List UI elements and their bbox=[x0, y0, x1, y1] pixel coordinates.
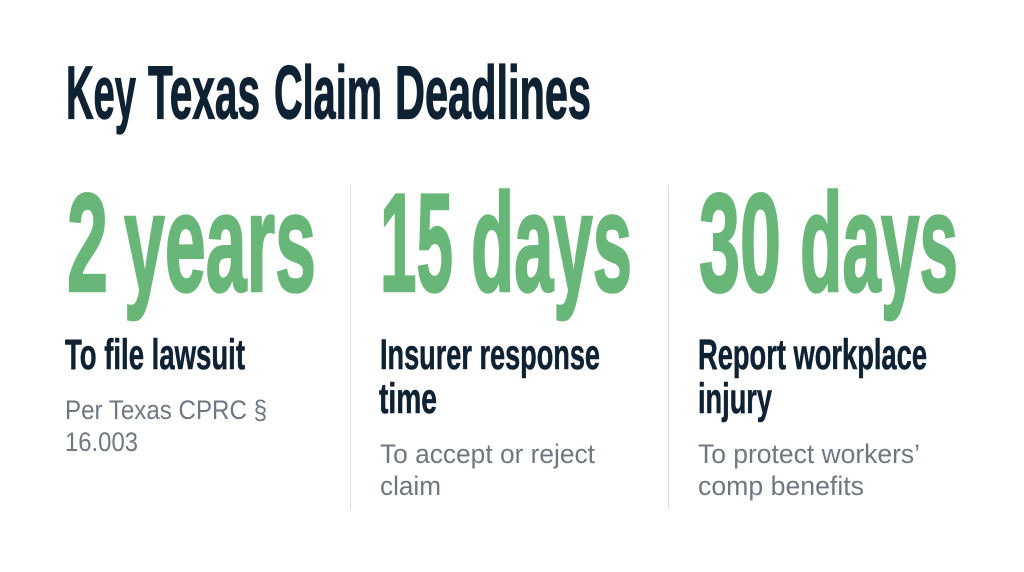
title: Claim bbox=[274, 50, 382, 134]
heading: insurer response time: time bbox=[379, 375, 437, 423]
description: per Texas CPRC: 16.003 bbox=[65, 427, 138, 457]
heading: to file lawsuit: To file lawsuit bbox=[65, 331, 245, 379]
title: Texas bbox=[148, 50, 260, 134]
big number: 15 days bbox=[380, 164, 632, 321]
title: Deadlines bbox=[395, 50, 591, 134]
title: Key bbox=[66, 50, 136, 134]
heading: insurer response time bbox=[379, 331, 600, 423]
big number: 2 years: years bbox=[124, 164, 316, 321]
title bbox=[66, 50, 591, 134]
heading: report workplace injury bbox=[698, 331, 927, 423]
panel: 15 days bbox=[379, 164, 632, 501]
description: to accept or reject claim bbox=[380, 439, 595, 501]
description: per Texas CPRC bbox=[65, 395, 267, 457]
big number: 15 days: days bbox=[471, 164, 632, 321]
panel: 30 days bbox=[698, 164, 958, 501]
big number: 2 years: 2 bbox=[67, 164, 108, 321]
big number: 15 days: 15 bbox=[380, 164, 453, 321]
heading: insurer response time: Insurer response bbox=[380, 331, 600, 379]
description: to accept or reject claim: To accept or reject bbox=[380, 439, 595, 469]
panel: 2 years bbox=[65, 164, 316, 457]
description: to protect workers' comp benefits: To protect workers’ bbox=[698, 439, 920, 469]
description: to protect workers' comp benefits: comp benefits bbox=[698, 471, 864, 501]
big number: 2 years bbox=[67, 164, 316, 321]
description: to protect workers' comp benefits bbox=[698, 439, 920, 501]
heading: report workplace injury: injury bbox=[698, 375, 772, 423]
big number: 30 days: 30 bbox=[699, 164, 781, 321]
description: to accept or reject claim: claim bbox=[380, 471, 441, 501]
big number: 30 days bbox=[699, 164, 958, 321]
description: per Texas CPRC: Per Texas CPRC § bbox=[65, 395, 267, 425]
